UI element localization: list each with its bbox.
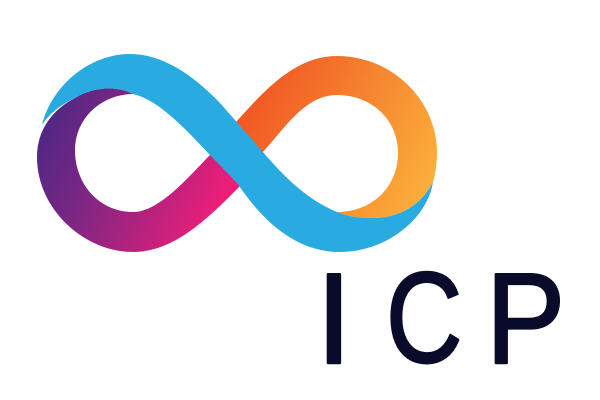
wordmark: ICP bbox=[316, 245, 565, 391]
letter P: P bbox=[486, 247, 565, 391]
letter I: I bbox=[316, 247, 352, 391]
letter C: C bbox=[386, 245, 462, 389]
left loop: purple to pink bbox=[37, 88, 240, 252]
right loop: orange to yellow bbox=[236, 56, 437, 218]
blue infinity band bbox=[42, 54, 433, 252]
